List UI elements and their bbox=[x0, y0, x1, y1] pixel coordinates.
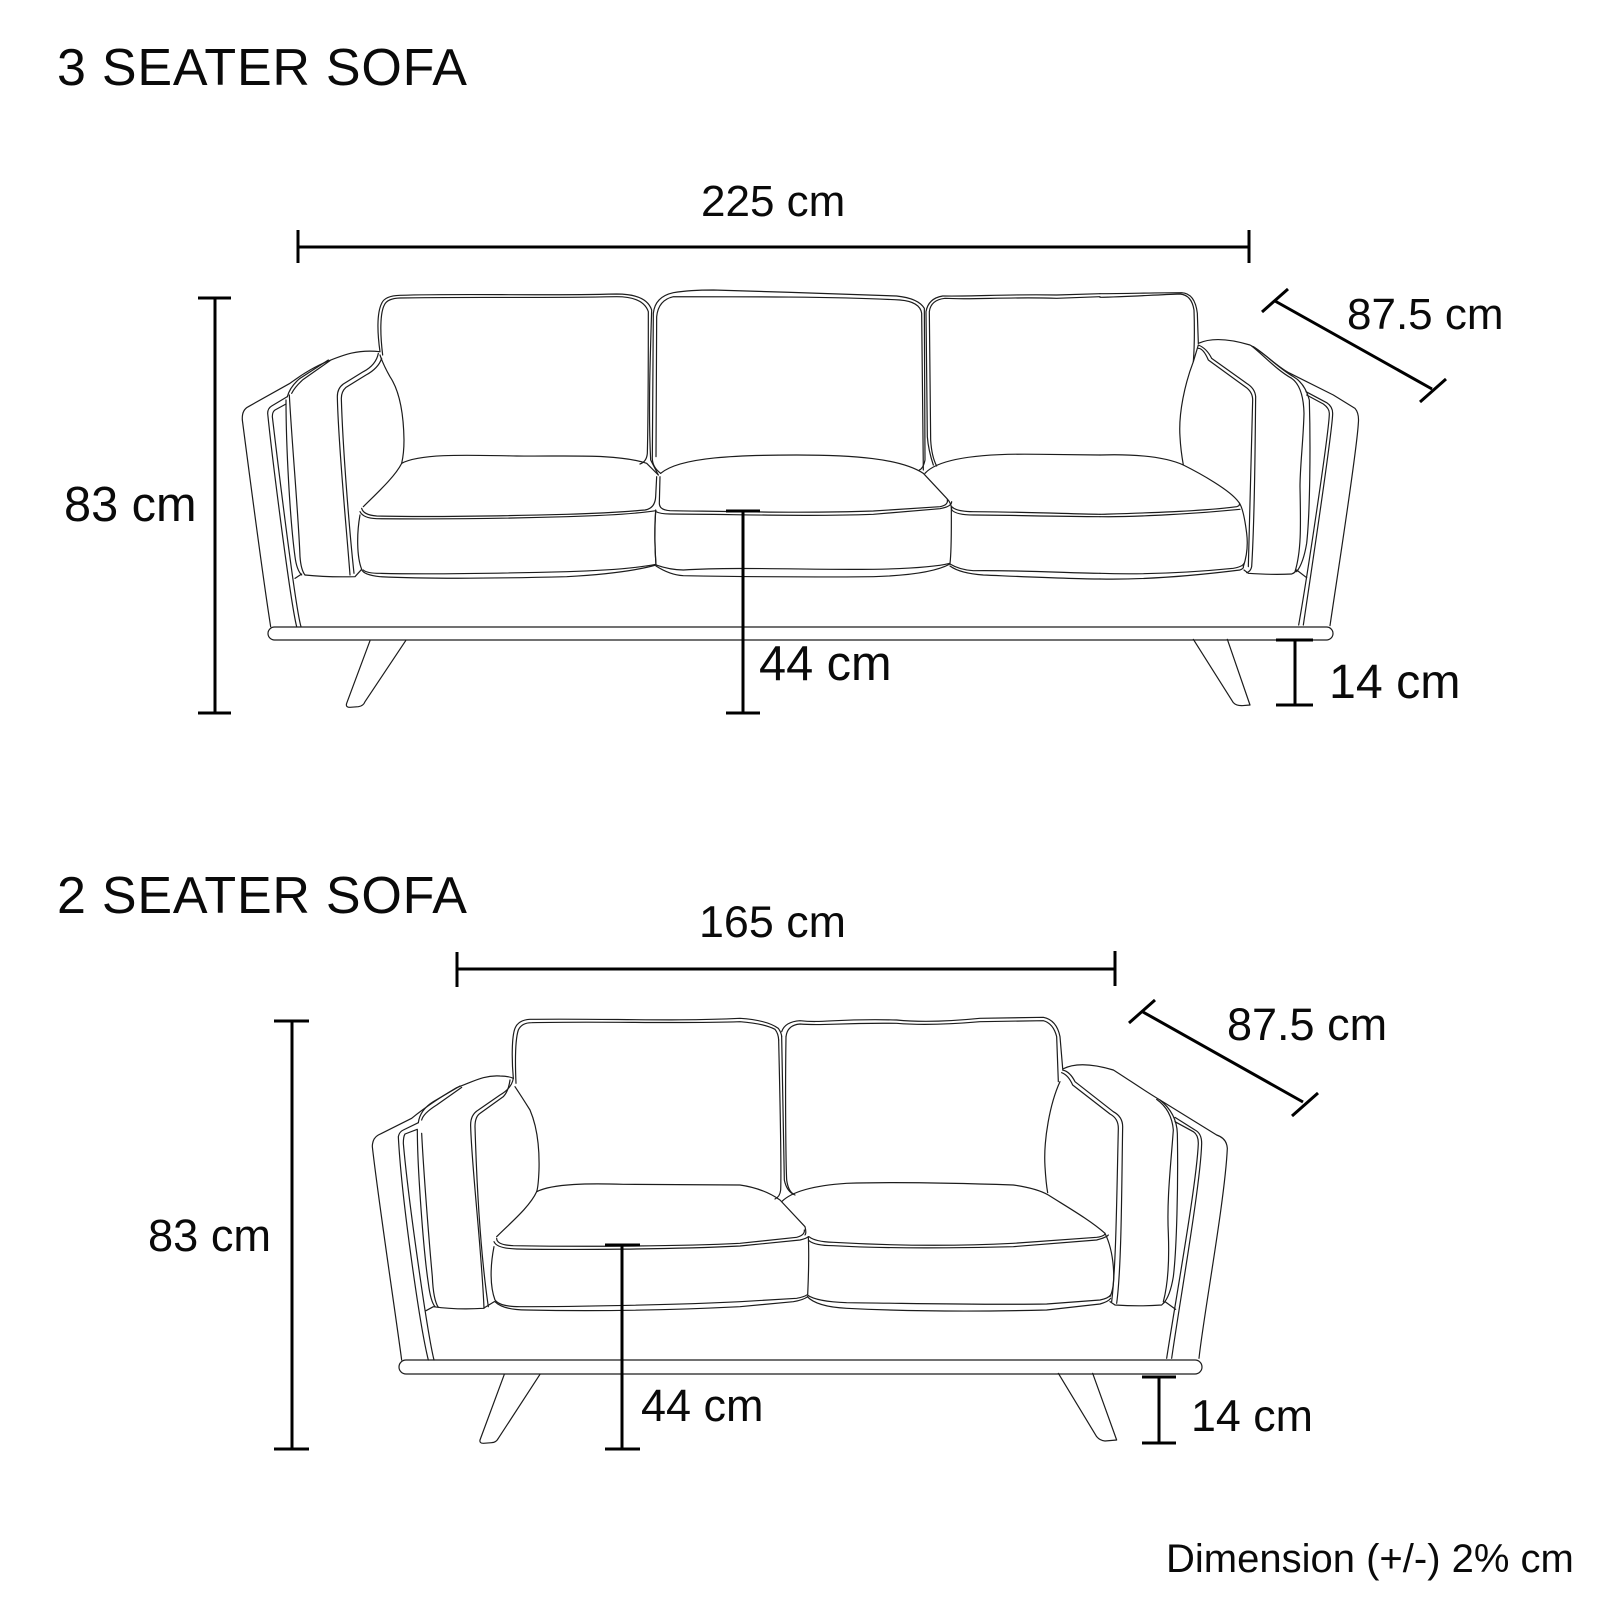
dimension: depth 87.5 cm: 87.5 cm bbox=[1227, 999, 1387, 1050]
dimension: leg height 14 cm bbox=[1276, 640, 1461, 709]
dimension: seat height 44 cm bbox=[605, 1245, 764, 1449]
title: 2 seater sofa: 2 SEATER SOFA bbox=[57, 867, 468, 925]
dimension: width 165 cm bbox=[457, 897, 1115, 987]
dimension: depth 87.5 cm bbox=[1129, 999, 1387, 1116]
right half of sofa bbox=[1100, 293, 1359, 706]
dimension: width 225 cm: 225 cm bbox=[701, 177, 845, 226]
left half of sofa bbox=[372, 1018, 809, 1443]
title: 3 seater sofa: 3 SEATER SOFA bbox=[57, 39, 468, 97]
centre of sofa bbox=[652, 290, 1100, 579]
dimension: height 83 cm bbox=[64, 297, 231, 713]
dimension: width 165 cm: 165 cm bbox=[699, 897, 846, 947]
dimension: leg height 14 cm bbox=[1142, 1377, 1313, 1443]
dimension: leg height 14 cm: 14 cm bbox=[1191, 1391, 1313, 1441]
base rail bbox=[268, 627, 1333, 640]
dimension: leg height 14 cm: 14 cm bbox=[1329, 655, 1461, 709]
base rail bbox=[399, 1360, 1202, 1374]
dimension: seat height 44 cm: 44 cm bbox=[641, 1380, 764, 1431]
footnote: tolerance: Dimension (+/-) 2% cm bbox=[1166, 1537, 1574, 1581]
left half of sofa bbox=[242, 294, 658, 707]
dimension: width 225 cm bbox=[298, 177, 1249, 263]
dimension: seat height 44 cm bbox=[726, 511, 892, 713]
right half of sofa bbox=[782, 1017, 1227, 1441]
sofa drawing: 2 seater bbox=[372, 1017, 1227, 1443]
dimension: seat height 44 cm: 44 cm bbox=[759, 637, 892, 691]
dimension: height 83 cm bbox=[148, 1021, 309, 1449]
dimension: height 83 cm: 83 cm bbox=[64, 478, 197, 532]
dimension: depth 87.5 cm: 87.5 cm bbox=[1347, 290, 1504, 339]
dimension: height 83 cm: 83 cm bbox=[148, 1210, 271, 1261]
sofa drawing: 3 seater bbox=[242, 290, 1359, 707]
dimension: depth 87.5 cm bbox=[1262, 289, 1504, 402]
